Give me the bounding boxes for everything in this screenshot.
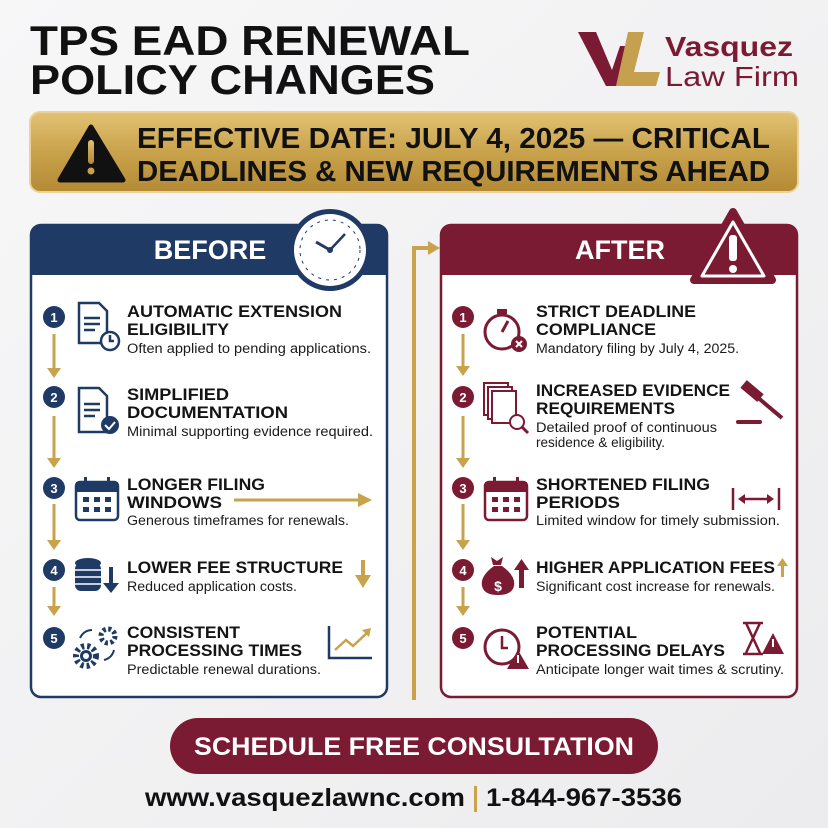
- item 1: [43, 302, 371, 356]
- contact line: 1-844-967-3536: [486, 784, 682, 812]
- item 4: 4: [459, 563, 467, 578]
- item 4: [452, 557, 788, 595]
- item 3: LONGER FILING: [127, 475, 265, 494]
- logo: Vasquez Law Firm: Vasquez: [665, 31, 793, 62]
- item 5: [43, 623, 372, 677]
- item 1: 1: [50, 310, 58, 325]
- title: [30, 17, 470, 103]
- item 5: POTENTIAL: [536, 623, 637, 642]
- logo: Vasquez Law Firm: Law Firm: [665, 61, 799, 92]
- item 1: Mandatory filing by July 4, 2025.: [536, 341, 739, 356]
- item 1: Often applied to pending applications.: [127, 341, 371, 356]
- item 4: 4: [50, 563, 58, 578]
- item 2: Detailed proof of continuous: [536, 420, 717, 435]
- item 5: Predictable renewal durations.: [127, 662, 321, 677]
- item 2: DOCUMENTATION: [127, 403, 288, 422]
- item 4: Significant cost increase for renewals.: [536, 579, 775, 594]
- item 5: Anticipate longer wait times & scrutiny.: [536, 662, 784, 677]
- logo: Vasquez Law Firm: [578, 31, 799, 92]
- item 2: [43, 385, 373, 439]
- item 2: SIMPLIFIED: [127, 385, 229, 404]
- item 1: ELIGIBILITY: [127, 320, 230, 339]
- item 1: AUTOMATIC EXTENSION: [127, 302, 342, 321]
- item 2: 2: [50, 390, 58, 405]
- item 3: PERIODS: [536, 493, 620, 512]
- button: schedule free consultation: [170, 718, 658, 774]
- item 2: INCREASED EVIDENCE: [536, 381, 730, 400]
- icon: warning triangle: [60, 127, 123, 180]
- down arrows: [456, 334, 470, 616]
- item 3: 3: [50, 481, 58, 496]
- item 2: 2: [459, 390, 467, 405]
- item 3: SHORTENED FILING: [536, 475, 710, 494]
- title: POLICY CHANGES: [30, 56, 435, 103]
- item 5: CONSISTENT: [127, 623, 241, 642]
- item 2: REQUIREMENTS: [536, 399, 675, 418]
- item 1: 1: [459, 310, 467, 325]
- item 5: 5: [459, 631, 467, 646]
- title: TPS EAD RENEWAL: [30, 17, 470, 64]
- item 3: Limited window for timely submission.: [536, 513, 780, 528]
- item 3: WINDOWS: [127, 493, 222, 512]
- button: schedule free consultation: SCHEDULE FREE CONSULTATION: [194, 733, 634, 761]
- panel: after: AFTER: [575, 235, 665, 265]
- banner: effective date: DEADLINES & NEW REQUIREMENTS AHEAD: [137, 156, 770, 188]
- item 1: [452, 302, 739, 356]
- panel: after: [441, 212, 797, 697]
- contact line: www.vasquezlawnc.com: [144, 784, 465, 812]
- item 4: [43, 558, 371, 594]
- banner: effective date: [30, 112, 798, 192]
- item 5: PROCESSING TIMES: [127, 641, 302, 660]
- item 4: $: [494, 578, 502, 594]
- item 1: STRICT DEADLINE: [536, 302, 696, 321]
- item 5: PROCESSING DELAYS: [536, 641, 725, 660]
- item 4: HIGHER APPLICATION FEES: [536, 558, 775, 577]
- item 2: residence & eligibility.: [536, 435, 665, 450]
- item 5: 5: [50, 631, 58, 646]
- contact line: [144, 784, 682, 812]
- item 3: Generous timeframes for renewals.: [127, 513, 349, 528]
- arrow: gold connector: [412, 241, 440, 700]
- panel: before: BEFORE: [154, 235, 266, 265]
- down arrows: [47, 334, 61, 616]
- item 4: Reduced application costs.: [127, 579, 297, 594]
- item 2: Minimal supporting evidence required.: [127, 424, 373, 439]
- item 3: 3: [459, 481, 467, 496]
- item 5: [452, 623, 784, 677]
- item 3: [43, 475, 372, 528]
- icon: warning triangle: [694, 212, 772, 280]
- panel: before: [31, 209, 387, 697]
- item 2: [452, 380, 782, 450]
- item 3: [452, 475, 780, 528]
- item 4: LOWER FEE STRUCTURE: [127, 558, 343, 577]
- icon: clock: [289, 209, 371, 291]
- item 1: COMPLIANCE: [536, 320, 656, 339]
- banner: effective date: EFFECTIVE DATE: JULY 4, 2025 — CRITICAL: [137, 123, 770, 155]
